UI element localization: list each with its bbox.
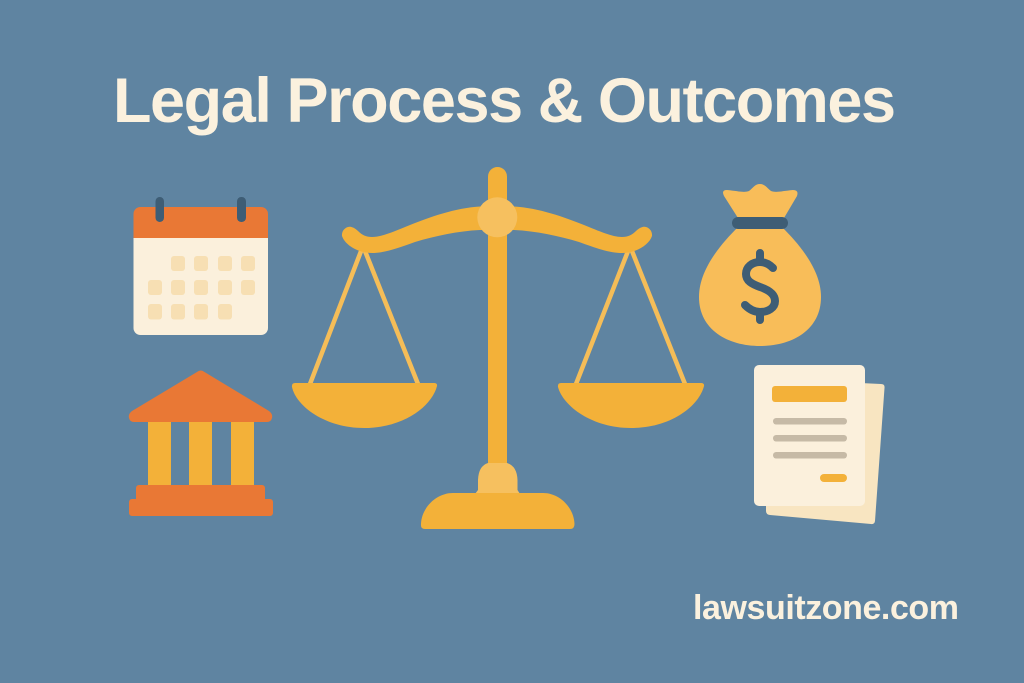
website footer: lawsuitzone.com	[693, 589, 959, 627]
right pan strings	[576, 246, 685, 384]
base	[421, 493, 574, 529]
icon: money bag	[699, 184, 821, 346]
icon: courthouse	[129, 370, 273, 516]
right pan	[558, 383, 704, 428]
document header bar	[772, 386, 847, 402]
left pan	[292, 383, 437, 428]
title: Legal Process & Outcomes	[113, 66, 896, 136]
document signature bar	[820, 474, 847, 482]
scale beam	[342, 206, 652, 253]
pedestal	[475, 463, 520, 494]
dollar sign	[745, 253, 775, 320]
left pan strings	[310, 246, 418, 384]
pivot hub	[477, 197, 517, 237]
back page	[766, 383, 885, 524]
icon: balance scale	[292, 167, 704, 529]
icon: documents	[754, 365, 885, 524]
scale pole	[488, 167, 507, 477]
document text lines	[773, 418, 847, 458]
front page	[754, 365, 865, 506]
icon: calendar	[134, 197, 268, 335]
